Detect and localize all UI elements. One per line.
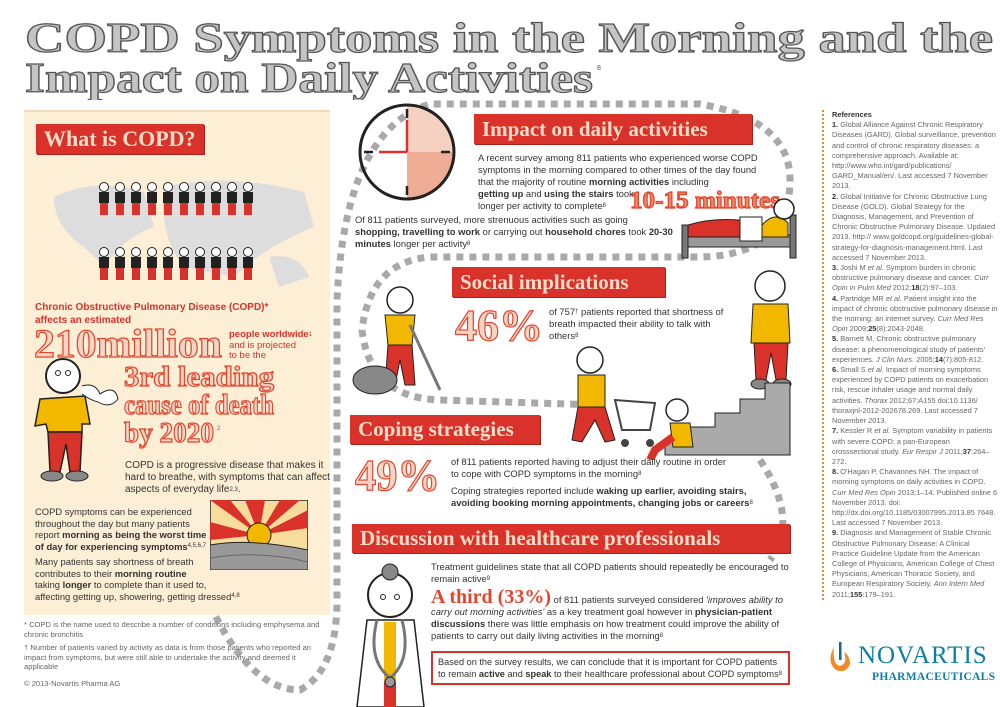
logo: novartis: NOVARTIS	[858, 642, 988, 669]
text: people worldwide	[229, 329, 312, 361]
text: recent survey: A recent survey among 811 patients who experienced worse COPD symptoms in the morning compared to other times of the day found that the majority of routine morning activities including	[478, 152, 758, 187]
stat: 3rd leading cause: 2	[217, 426, 221, 432]
icon: shopping cart person	[571, 346, 656, 447]
icon: clock	[358, 104, 456, 200]
text: people worldwide: and is projected	[229, 340, 296, 350]
stat: 3rd leading cause: cause of death	[124, 390, 274, 421]
callout: conclusion: Based on the survey results, we can conclude that it is important for COPD patients to remain active and speak to their healthcare professional about COPD symptoms8	[438, 657, 782, 679]
text: recent survey: longer per activity to complete8	[478, 200, 606, 211]
references: 2. Global Initiative for Chronic Obstructive Lung Disease (GOLD). Global Strategy for the Diagnosis, Management, and Prevention of Chronic Obstructive Pulmonary Disease. Updated 2013. http:// www.goldcopd.org/guidelines-global-strategy-for-diagnosis-management.html. Last accessed 7 November 2013.	[832, 192, 995, 262]
text: progressive disease: COPD is a progressive disease that makes it hard to breathe, with symptoms that can affect aspects of everyday life2,3.	[125, 460, 330, 495]
text: COPD affects: affects an estimated	[35, 314, 131, 326]
icon: breathless person	[34, 358, 118, 482]
heading: discussion: Discussion with healthcare professionals	[360, 526, 720, 550]
icon: novartis flame	[830, 642, 850, 672]
heading: impact on daily activities	[474, 114, 752, 144]
references: 6. Small S et al. Impact of morning symptoms experienced by COPD patients on exacerbation risk, rescue inhaler usage and normal daily activities. Thorax 2012;67:A155 doi:10.1136/ thoraxjnl-2012-202678.269. Last accessed 7 November 2013.	[832, 365, 988, 425]
text: treatment guidelines: Treatment guidelines state that all COPD patients should repeatedly be encouraged to remain active9	[431, 561, 789, 584]
references	[822, 110, 998, 600]
text: morning routine	[35, 556, 240, 602]
text: 49%: of 811 patients reported having to adjust their daily routine in order to cope with COPD symptoms in the morning8	[451, 456, 726, 479]
footnotes: * COPD is the name used to describe a number of conditions including emphysema and chronic bronchitis	[24, 620, 319, 638]
icon: stairs	[646, 382, 790, 460]
text: morning routine: taking longer to complete than it used to,	[35, 579, 206, 590]
icon: standing person	[750, 270, 792, 390]
icon: person in bed	[682, 198, 796, 258]
references: 3. Joshi M et al. Symptom burden in chronic obstructive pulmonary disease and cancer. Curr Opin in Pulm Med 2012;18(2):97–103.	[832, 263, 989, 292]
callout: conclusion	[431, 651, 790, 685]
logo: novartis	[830, 642, 995, 683]
logo: novartis: PHARMACEUTICALS	[872, 671, 995, 683]
title: COPD Symptoms in the Morning and the	[25, 16, 993, 62]
text: morning routine: affecting getting up, showering, getting dressed4,8	[35, 591, 240, 602]
footnotes: © 2013-Novartis Pharma AG	[24, 678, 120, 688]
heading: discussion	[352, 524, 790, 553]
icon: doctor	[356, 564, 425, 707]
text: a third: A third (33%) of 811 patients surveyed considered 'improves ability to carry out morning activities' as a key treatment goal however in physician-patient discussions there was little emphasis on how treatment could improve the ability of patients to carry out daily living activities in the morning8	[431, 586, 783, 641]
references: 4. Partridge MR et al. Patient insight into the impact of chronic obstructive pulmonary disease in the morning: an internet survey. Curr Med Res Opin 2009;25(8):2043-2048.	[832, 294, 998, 333]
text: morning routine: Many patients say shortness of breath	[35, 556, 193, 567]
references: 1. Global Alliance Against Chronic Respiratory Diseases (GARD). Global surveillance, prevention and control of chronic respiratory diseases: a comprehensive approach. Available at: http://www.who.int/gard/publications/ GARD_Manual/en/. Last accessed 7 November 2013.	[832, 120, 996, 190]
references: 8. O'Hagan P, Chavannes NH. The impact of morning symptoms on daily activities in COPD. Curr Med Res Opin 2013;1–14. Published online 6 November 2013. doi: http://dx.doi.org/10.1185/03007995.2013.85 7648. Last accessed 7 November 2013.	[832, 467, 997, 527]
references: 5. Barnett M. Chronic obstructive pulmonary disease: a phenomenological study of patients' experiences. J Clin Nurs. 2005;14(7):805-812.	[832, 334, 985, 364]
heading: impact on daily activities: Impact on daily activities	[482, 117, 708, 141]
icon: vacuum person	[352, 286, 442, 394]
references: 9. Diagnosis and Management of Stable Chronic Obstructive Pulmonary Disease: A Clinical Practice Guideline Update from the American College of Physicians, American College of Chest Physicians, American Thoracic Society, and European Respiratory Society. Ann Intern Med 2011;155:179–191.	[832, 528, 994, 599]
text: COPD affects: Chronic Obstructive Pulmonary Disease (COPD)*	[35, 302, 268, 313]
stat: 3rd leading cause: 3rd leading	[124, 362, 274, 393]
text: recent survey	[478, 152, 758, 211]
world map with people	[54, 180, 314, 287]
heading: social implications: Social implications	[460, 270, 629, 294]
icon: sunrise	[210, 500, 308, 570]
heading: what is COPD: What is COPD?	[44, 126, 196, 151]
panel: what is COPD	[24, 110, 330, 615]
text: morning worst: COPD symptoms can be experienced throughout the day but many patients report morning as being the worst time of day for experiencing symptoms4,5,6,7	[35, 506, 206, 552]
text: COPD affects	[35, 302, 268, 326]
footnotes: † Number of patients varied by activity as data is from those patients who reported an impact from symptoms, but were still able to undertake the activity and deemed it applicable	[24, 643, 311, 671]
heading: coping strategies	[350, 415, 540, 444]
footnotes	[24, 620, 319, 688]
references: References	[832, 110, 872, 119]
text: 46%: of 757† patients reported that shortness of breath impacted their ability to talk with others8	[549, 306, 723, 341]
title	[25, 16, 993, 100]
stat: 3rd leading cause: by 2020	[124, 418, 214, 449]
text: recent survey: getting up and using the stairs took	[478, 188, 634, 199]
text: coping strategies: Coping strategies reported include waking up earlier, avoiding stairs, avoiding booking morning appointments, changing jobs or careers8	[451, 485, 753, 508]
stat: 10-15 minutes: 10-15 minutes	[630, 188, 780, 214]
text: strenuous activities: Of 811 patients surveyed, more strenuous activities such as going shopping, travelling to work or carrying out household chores took 20-30 minutes longer per activity8	[355, 214, 673, 249]
stat: 3rd leading cause	[124, 362, 274, 449]
title: 8	[597, 65, 601, 72]
text: people worldwide: to be the	[229, 350, 266, 361]
text: people worldwide: people worldwide1	[229, 329, 312, 340]
heading: social implications	[452, 267, 665, 297]
heading: coping strategies: Coping strategies	[358, 417, 514, 441]
references: 7. Kessler R et al. Symptom variability in patients with severe COPD: a pan-European crosssectional study. Eur Respir J 2011;37:264–272.	[832, 426, 992, 466]
text: morning routine: contributes to their morning routine	[35, 568, 187, 579]
